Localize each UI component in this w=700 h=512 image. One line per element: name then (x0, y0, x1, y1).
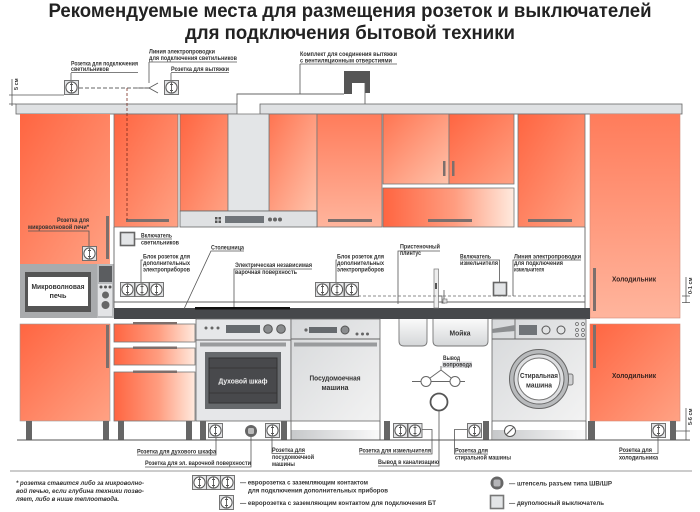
countertop label (184, 244, 244, 309)
dishwasher socket (266, 424, 314, 468)
grinder switch (460, 254, 506, 296)
socket block left: электроприборов (143, 266, 190, 274)
dishwasher: машина (322, 383, 349, 392)
refrigerator upper door (590, 114, 680, 318)
electric hob (195, 307, 290, 310)
footnote: ляет, либо в нише теплоотвода. (15, 495, 119, 503)
legend: two-pole switch (490, 496, 604, 508)
grinder switch: Включатель (460, 254, 491, 260)
vent kit label: Комплект для соединения вытяжки (300, 51, 397, 58)
dishwasher (291, 319, 380, 421)
countertop label: Столешница (211, 244, 244, 252)
top shelf right (260, 104, 682, 114)
socket block left: Блок розеток для (143, 254, 190, 260)
grinder switch: измельчителя (460, 260, 498, 267)
socket block right: дополнительных (337, 260, 384, 267)
washing machine socket: стиральной машины (455, 454, 511, 462)
washing machine: Стиральная (520, 371, 558, 380)
faucet (434, 269, 447, 308)
lower left cabinet (20, 324, 110, 421)
baseboard label (398, 242, 440, 304)
socket block left: дополнительных (143, 260, 190, 267)
water supply outlet: вопровода (443, 362, 472, 368)
socket block right: Блок розеток для (337, 254, 384, 260)
refrigerator socket: Розетка для (619, 447, 652, 454)
legend: single euro socket (220, 496, 436, 510)
socket for light fixtures: Розетка для подключения (71, 60, 138, 68)
5 cm dimension: 5 см (14, 78, 20, 90)
grinder wiring label: для подключения (514, 260, 563, 267)
footnote: * розетка ставится либо за микроволно- (16, 479, 144, 487)
oven socket: Розетка для духового шкафа (137, 448, 216, 456)
legend: triple euro socket: для подключения дополнительных приборов (248, 486, 388, 494)
lighting wiring line (79, 48, 237, 220)
socket block right (316, 254, 384, 296)
microwave socket: Розетка для (57, 217, 89, 224)
grinder wiring label: измельчителя (514, 266, 544, 274)
light switch (120, 232, 179, 246)
sewer outlet: Вывод в канализацию (378, 459, 439, 466)
lighting wiring line: Линия электропроводки (149, 48, 215, 56)
washing machine socket (454, 424, 511, 462)
grinder wiring label (513, 254, 581, 296)
legend: triple euro socket (192, 476, 388, 494)
legend: two-pole switch: — двуполюсный выключатель (509, 499, 604, 507)
hob label (234, 262, 312, 307)
legend: plug connector: — штепсель разъем типа ШВ/ШР (509, 480, 613, 488)
dishwasher socket: посудомоечной (272, 453, 314, 461)
hob label: варочная поверхность (235, 269, 297, 276)
vent connection kit (237, 71, 370, 104)
grinder socket: Розетка для измельчителя (359, 448, 431, 454)
hob label: Электрическая независимая (235, 262, 312, 269)
top shelf left (16, 104, 237, 114)
light switch: светильников (141, 240, 179, 246)
legend: plug connector (490, 476, 613, 490)
refrigerator socket (619, 424, 666, 462)
5-6 cm dimension: 5-6 см (688, 408, 694, 425)
5 cm dimension (9, 78, 64, 106)
built-in oven (196, 319, 291, 421)
washing machine socket: Розетка для (455, 448, 488, 454)
dishwasher socket: Розетка для (272, 447, 305, 454)
microwave oven: печь (50, 293, 67, 300)
legend: triple euro socket: — евророзетка с заземляющим контактом (240, 480, 368, 486)
backsplash baseboard (114, 227, 585, 308)
title: для подключения бытовой техники (185, 23, 515, 44)
footnote: вой печью, если глубина техники позво- (16, 487, 144, 495)
light switch: Включатель (141, 232, 172, 240)
oven socket (137, 424, 222, 456)
title (48, 1, 652, 44)
washing machine (492, 319, 586, 421)
hob power plug (145, 425, 257, 467)
socket block left (120, 254, 190, 296)
refrigerator lower door (590, 324, 680, 421)
baseboard label: плинтус (400, 250, 421, 257)
refrigerator upper door: Холодильник (612, 274, 656, 284)
floor line (17, 439, 690, 441)
sink (399, 319, 488, 346)
grinder wiring dashed line (358, 295, 585, 297)
socket for light fixtures: светильников (71, 66, 109, 73)
appliance plinths (291, 421, 586, 440)
socket for light fixtures (64, 60, 138, 94)
footnote (15, 479, 144, 503)
microwave socket: микроволновой печи* (28, 223, 89, 231)
refrigerator lower door: Холодильник (612, 371, 656, 380)
washing machine: машина (526, 380, 553, 390)
washing machine outlet symbol (504, 426, 516, 436)
countertop (114, 308, 590, 319)
sink: Мойка (450, 328, 471, 338)
water supply outlet: Вывод (443, 355, 460, 362)
legend: single euro socket: — евророзетка с заземляющим контактом для подключения БТ (240, 500, 436, 507)
socket for range hood: Розетка для вытяжки (171, 66, 229, 73)
socket for range hood (164, 66, 229, 94)
dishwasher: Посудомоечная (310, 374, 360, 382)
refrigerator socket: холодильника (619, 454, 658, 462)
dishwasher socket: машины (272, 461, 295, 468)
grinder socket (359, 424, 432, 454)
microwave oven (20, 264, 114, 318)
baseboard label: Пристеночный (400, 242, 440, 250)
vent kit label: с вентиляционным отверстиями (300, 58, 392, 64)
socket block right: электроприборов (337, 266, 384, 274)
upper cabinets (20, 114, 585, 264)
sewer outlet (378, 394, 448, 466)
5-6 cm dimension (676, 408, 694, 440)
0-1 cm dimension: 0-1 см (688, 277, 694, 294)
built-in oven: Духовой шкаф (218, 376, 268, 386)
microwave socket (28, 217, 96, 260)
grinder wiring label: Линия электропроводки (514, 254, 581, 260)
legend divider (10, 470, 692, 472)
hob power plug: Розетка для эл. варочной поверхности (145, 459, 251, 467)
0-1 cm dimension (682, 277, 694, 303)
cabinet legs (26, 421, 676, 440)
lighting wiring line: для подключения светильников (149, 55, 237, 62)
drawers (114, 322, 195, 421)
vent kit label (300, 51, 397, 94)
microwave oven: Микроволновая (32, 284, 84, 291)
title: Рекомендуемые места для размещения розеток и выключателей (48, 1, 652, 22)
water supply outlet (412, 355, 472, 386)
range hood (180, 114, 317, 227)
